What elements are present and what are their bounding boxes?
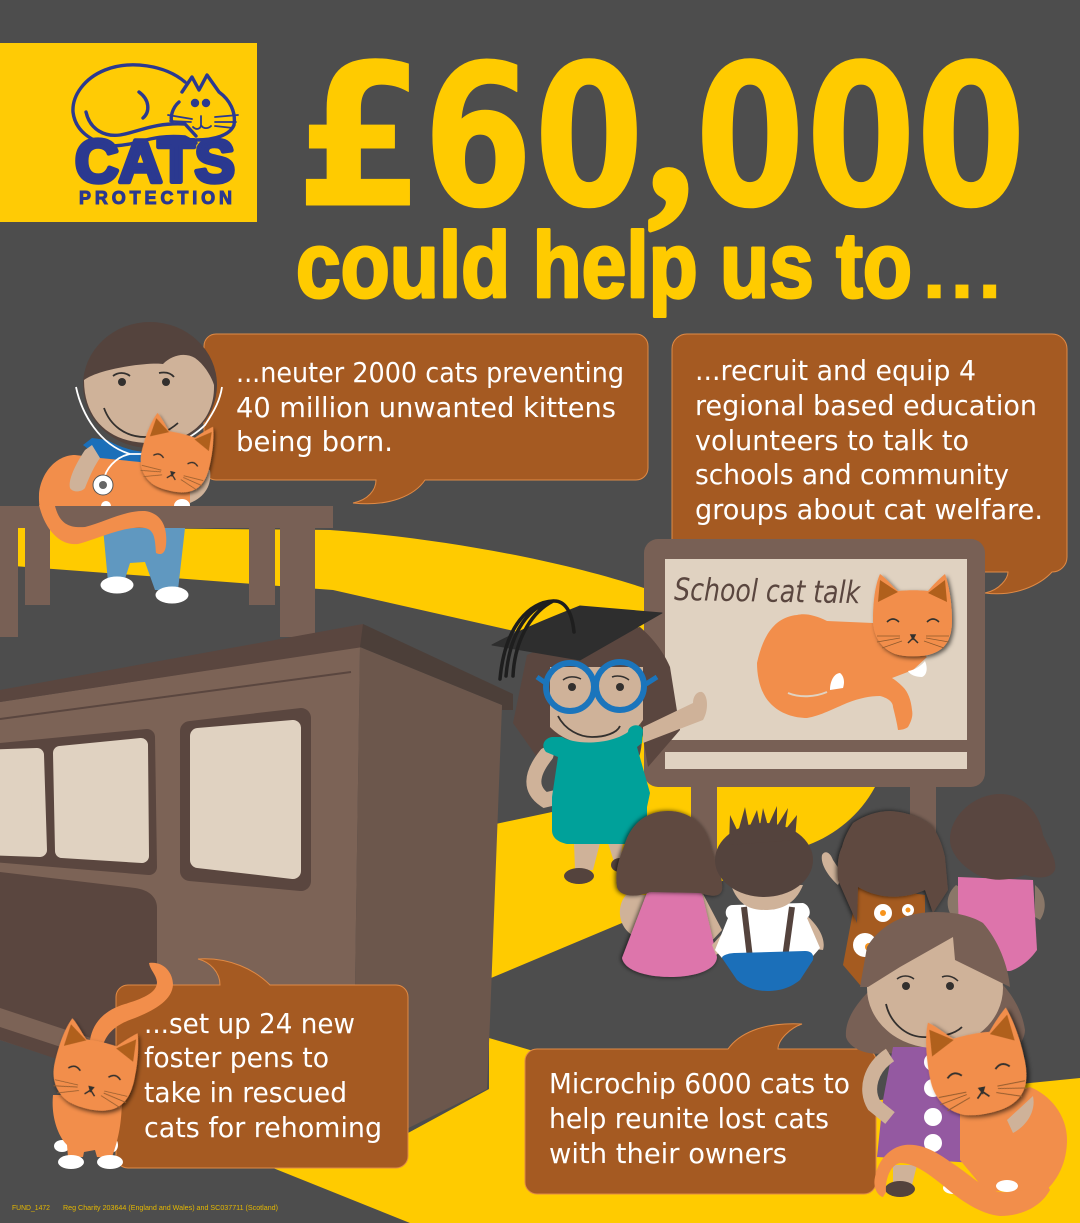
bubble text: take in rescued: [144, 1076, 347, 1109]
hair: [616, 811, 722, 896]
yellow winding road, upper: [0, 527, 875, 978]
arms: [712, 910, 824, 955]
logo wordmark CATS: CATS: [75, 128, 235, 195]
boat roof side: [360, 624, 513, 710]
boat window middle: [0, 737, 149, 867]
fringe: [860, 912, 1010, 987]
cat body: [39, 455, 190, 542]
hair: [838, 811, 948, 923]
child: girl in pink, far right: [948, 794, 1055, 971]
bubble text: being born.: [236, 425, 393, 458]
vet with cat on table: [0, 322, 333, 637]
cat white paws: [101, 499, 190, 513]
vet left arm: [70, 445, 100, 491]
cat body: [960, 1087, 1067, 1195]
cat head: [134, 411, 219, 499]
bubble text: [144, 1007, 382, 1144]
boat lower panel: [0, 872, 157, 1060]
suspenders: [744, 907, 792, 958]
spiky hair: [715, 806, 813, 897]
bubble text: groups about cat welfare.: [695, 493, 1043, 526]
flowers: [853, 904, 914, 957]
footer charity registration: Reg Charity 203644 (England and Wales) and SC037711 (Scotland): [63, 1205, 278, 1212]
dress: [843, 885, 925, 985]
teacher legs: [574, 843, 623, 870]
face: [867, 928, 1003, 1048]
board frame: [644, 539, 985, 787]
eyes: [897, 976, 958, 990]
logo wordmark PROTECTION: PROTECTION: [79, 188, 232, 208]
vet shoes: [100, 576, 188, 604]
logo cat line art: [73, 65, 238, 146]
board handwriting: School cat talk: [674, 572, 861, 611]
bubble text: regional based education: [695, 389, 1037, 422]
vet right arm: [170, 460, 210, 503]
cat head: [920, 1006, 1033, 1123]
bubble text: [236, 356, 624, 458]
dress: [877, 1047, 975, 1163]
cat tail: [874, 1145, 1050, 1216]
vet shirt: [83, 438, 205, 470]
raised arm: [822, 852, 843, 885]
tassel: [500, 601, 574, 679]
cat paws: [943, 1180, 1018, 1194]
narrowboat: [0, 624, 513, 1157]
stethoscope: [76, 387, 222, 495]
buttons: [924, 1053, 942, 1152]
title subline: could help us to: [296, 213, 912, 317]
child: boy with spiky hair: [712, 806, 824, 991]
leg and shoe: [893, 1165, 917, 1185]
speech bubble: microchip: [525, 1024, 876, 1194]
title amount: ,: [648, 22, 693, 243]
speech bubble: neuter: [204, 334, 648, 504]
child: girl in pink, seated: [616, 811, 722, 977]
left arm: [870, 1055, 890, 1118]
bubble text: Microchip 6000 cats to: [549, 1067, 850, 1100]
hair: [950, 794, 1055, 880]
arms: [948, 885, 1045, 920]
dress: [958, 877, 1037, 971]
hair back: [846, 985, 1025, 1060]
shirt: [715, 903, 820, 958]
bubble text: 40 million unwanted kittens: [236, 391, 616, 424]
cat back paws: [54, 1138, 118, 1152]
teacher right arm: [643, 692, 707, 743]
bubble text: ...set up 24 new: [144, 1007, 355, 1040]
board lower strip: [665, 752, 967, 769]
presentation board: [644, 539, 985, 870]
teacher glasses: [537, 662, 657, 711]
yellow winding road, lower: [273, 1038, 1080, 1223]
bubble text: with their owners: [549, 1137, 787, 1170]
cat with raised tail: [46, 963, 173, 1169]
boat skirt: [0, 1027, 350, 1157]
logo panel: [0, 43, 257, 222]
dress: [622, 885, 717, 977]
cat body: [53, 1095, 122, 1157]
cat head: [46, 1017, 145, 1118]
speech bubble: foster pens: [116, 959, 408, 1168]
cat tail: [90, 963, 173, 1045]
cat tail: [39, 505, 166, 554]
girl holding cat: [846, 912, 1067, 1216]
vet trousers: [103, 528, 185, 590]
arms: [620, 892, 722, 945]
title amount: [295, 22, 1026, 252]
teacher smile: [558, 716, 620, 737]
teacher dress: [543, 725, 650, 844]
title amount: 6: [423, 23, 533, 252]
board screen: [665, 559, 967, 740]
title amount: £: [295, 23, 425, 252]
shorts: [722, 951, 813, 991]
title amount: 0: [695, 23, 805, 252]
teacher hair: [513, 627, 680, 767]
cat front paws: [58, 1155, 123, 1169]
title subline: ...: [922, 218, 1002, 317]
title amount: 0: [534, 23, 644, 252]
teacher face: [550, 667, 643, 745]
teacher shoes: [564, 858, 629, 884]
child: girl in flower dress: [822, 811, 948, 985]
bubble text: volunteers to talk to: [695, 424, 969, 457]
boat side wall: [350, 647, 502, 1157]
teacher: [492, 601, 707, 884]
right arm: [1007, 1096, 1034, 1133]
board cat: [757, 574, 952, 730]
board legs: [691, 780, 936, 870]
bubble text: foster pens to: [144, 1041, 329, 1074]
bubble text: cats for rehoming: [144, 1111, 382, 1144]
boat roof front: [0, 624, 363, 702]
speech bubble: education volunteers: [672, 334, 1067, 594]
bubble text: [695, 354, 1043, 526]
teacher eyes: [563, 676, 629, 691]
bubble text: help reunite lost cats: [549, 1102, 829, 1135]
bubble text: schools and community: [695, 458, 1009, 491]
bubble text: ...neuter 2000 cats preventing: [236, 356, 624, 389]
smile: [886, 1004, 962, 1037]
title amount: 0: [806, 23, 916, 252]
boat window right: [190, 718, 301, 881]
vet head: [83, 322, 217, 448]
bubble text: ...recruit and equip 4: [695, 354, 976, 387]
teacher left arm: [534, 755, 562, 800]
table top and legs: [0, 506, 333, 637]
footer reference code: FUND_1472: [12, 1205, 50, 1212]
neck: [731, 885, 803, 910]
mortarboard cap: [492, 606, 662, 660]
boat front wall: [0, 647, 360, 1155]
title amount: 0: [916, 23, 1026, 252]
bubble text: [549, 1067, 850, 1170]
